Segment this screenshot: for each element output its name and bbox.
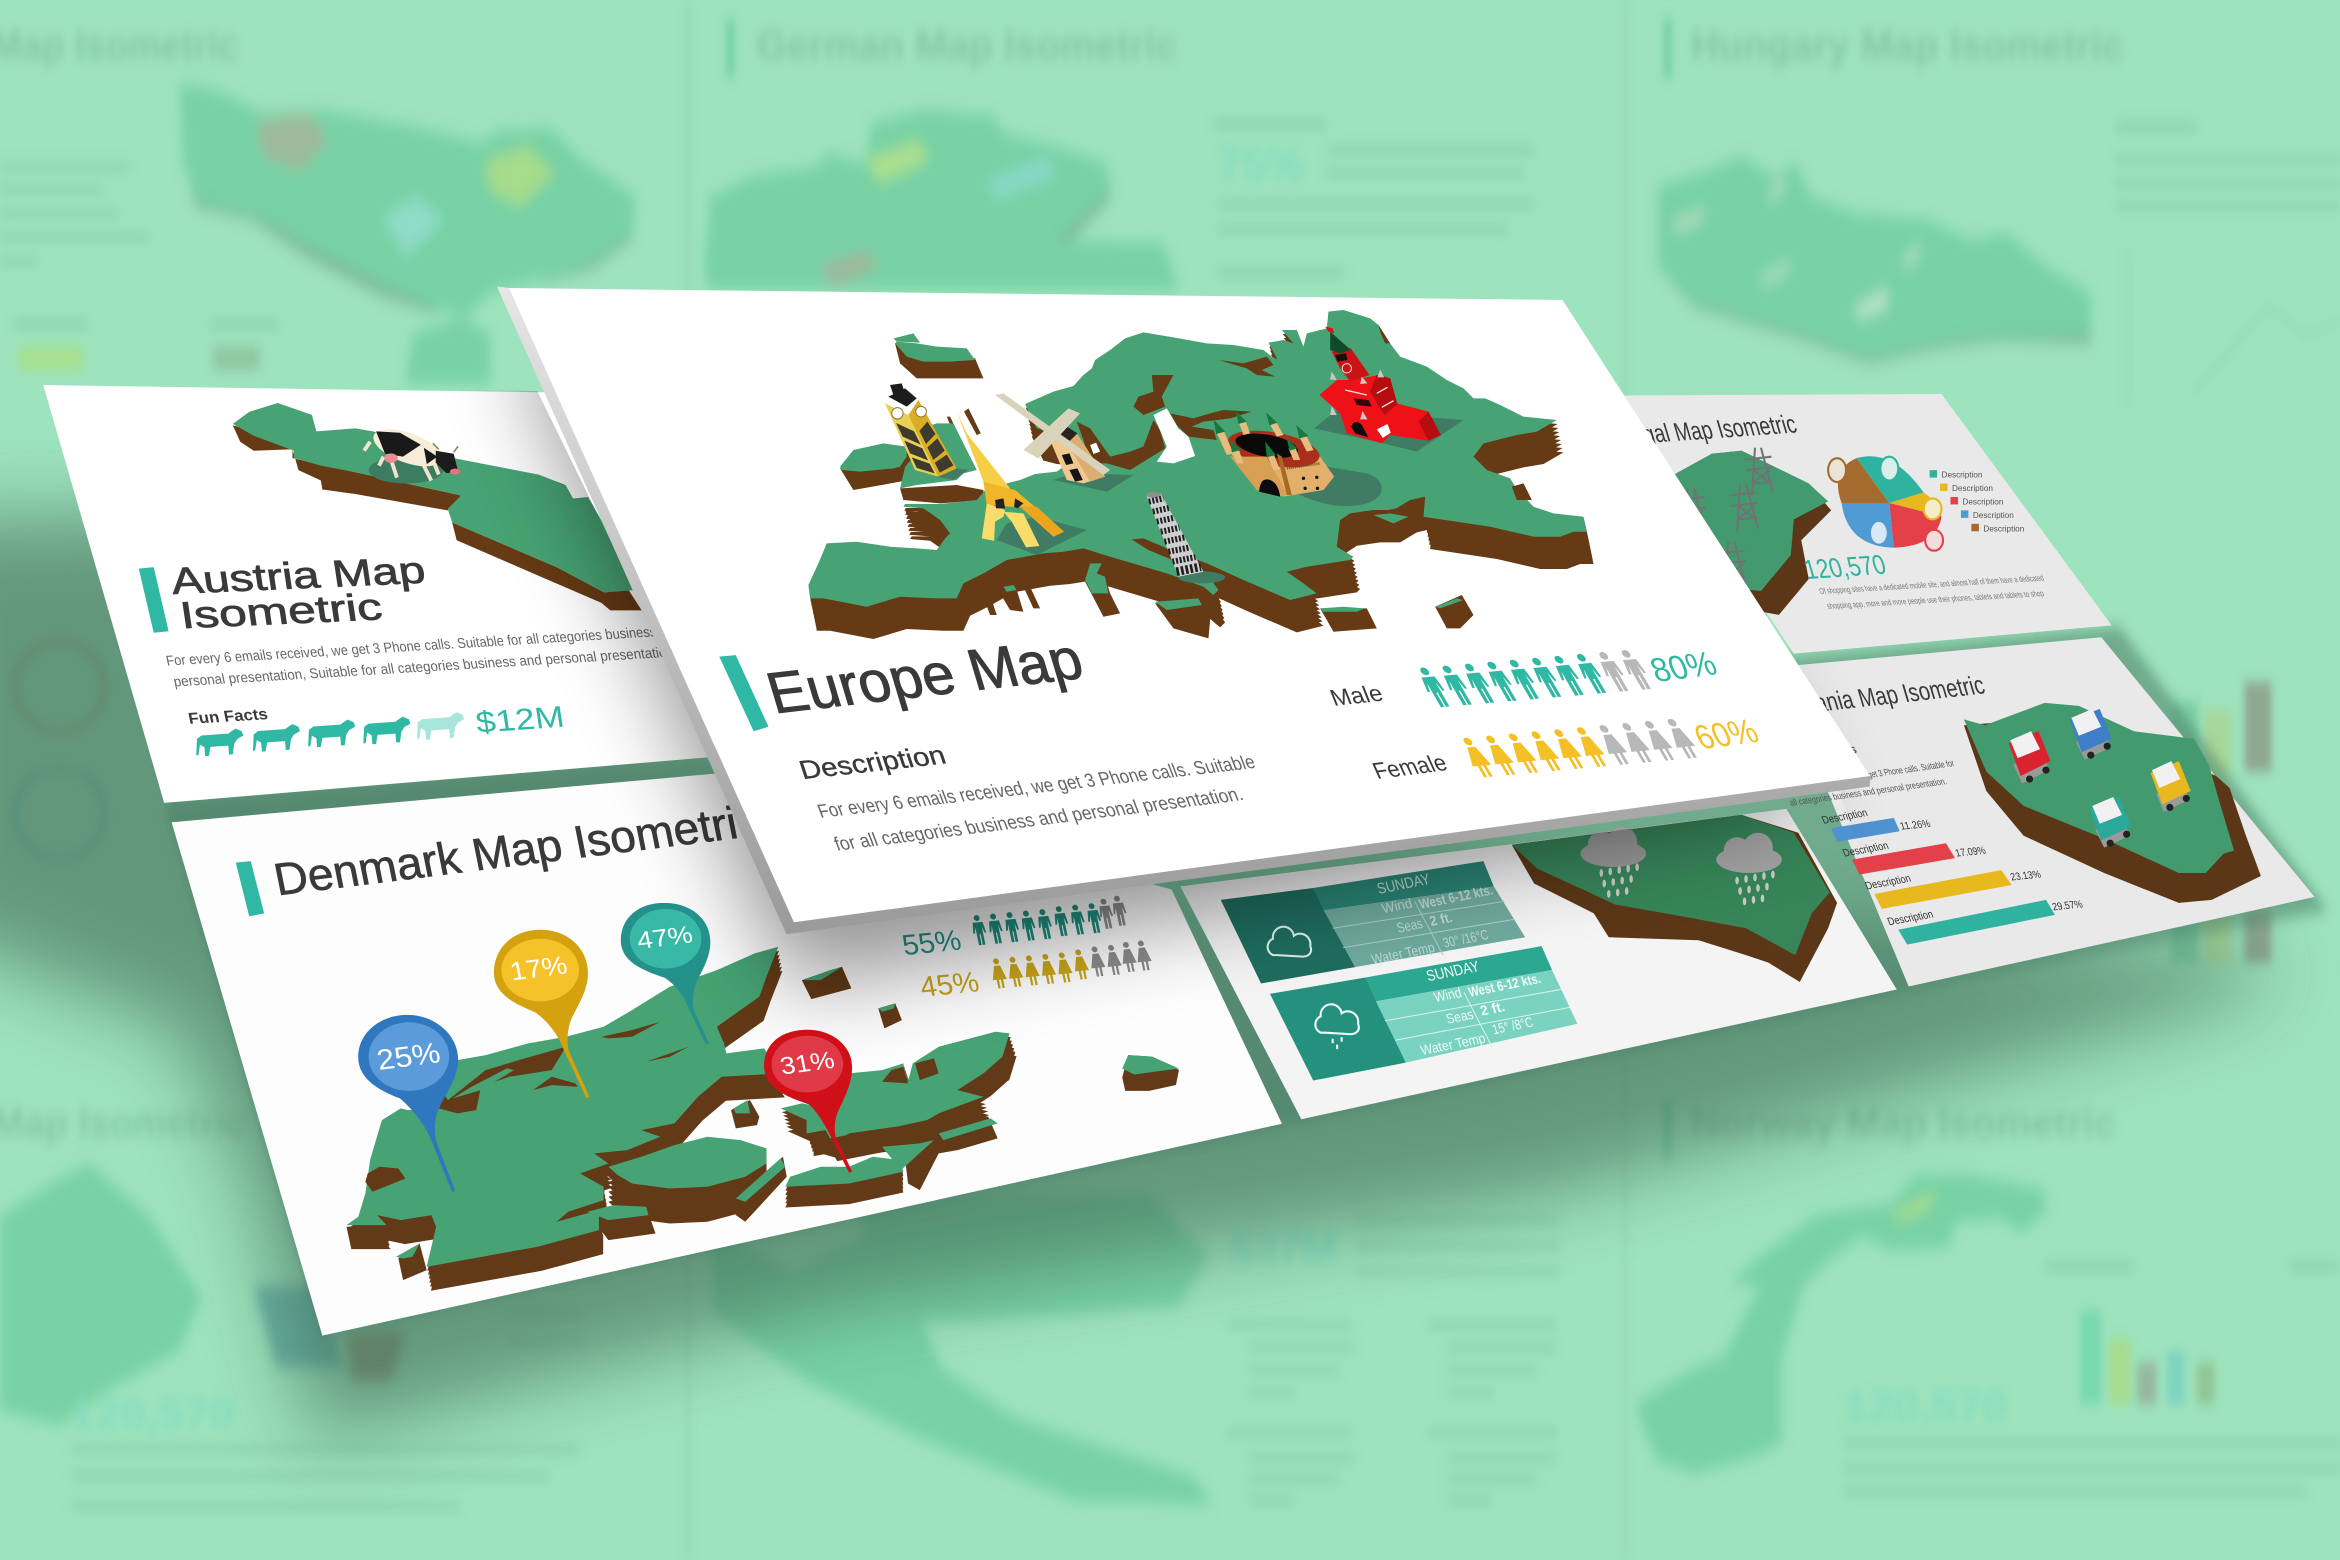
bar chart: 23.13% — [2009, 869, 2043, 883]
weather table: lower: Seas — [1444, 1006, 1475, 1027]
map: Denmark — [346, 947, 1017, 1291]
weather table: upper: 2 ft. — [1427, 909, 1454, 929]
bar chart: Description — [1820, 807, 1870, 827]
stat: $12M — [474, 701, 567, 740]
bar chart: right slide — [2171, 701, 2198, 963]
pin: 31% — [764, 1030, 852, 1173]
heading: Romania: Romania Map Isometric — [1769, 670, 1988, 722]
legend: Description — [1942, 471, 1983, 480]
stat: 120,570 — [1800, 549, 1890, 585]
background map: lower left — [0, 1164, 201, 1425]
pin: 31%: 31% — [778, 1047, 837, 1080]
map: Europe — [808, 310, 1594, 639]
ring charts — [15, 642, 104, 731]
blurred slide blobs — [254, 1286, 343, 1367]
paragraph — [1818, 573, 2045, 611]
description text — [815, 751, 1258, 855]
icons: cows — [196, 712, 464, 757]
icon: car blue — [2070, 709, 2112, 760]
bar chart: 11.26% — [1899, 818, 1932, 833]
icon: Colosseum — [1213, 412, 1334, 497]
bar chart: Description — [1863, 873, 1913, 892]
sea cuts — [1077, 325, 1532, 500]
paragraph: shopping app, more and more people use their phones, tablets and tablets to shop — [1825, 588, 2045, 611]
people stat: female: 60% — [1688, 713, 1764, 757]
line chart: Hungary slide — [2194, 306, 2340, 391]
label: fun facts: Fun Facts — [187, 706, 270, 728]
shadow cast by main slide onto others — [515, 336, 1813, 985]
legend: Description — [1962, 497, 2004, 506]
icon: rain clouds — [1580, 827, 1782, 905]
weather table: lower: West 6-12 kts. — [1466, 970, 1542, 1000]
blurred title: Norway: Norway Map Isometric — [1691, 1099, 2116, 1146]
icon: cloud — [1268, 927, 1311, 957]
icon: Eiffel Tower — [957, 412, 1064, 547]
weather table: upper: Water Temp — [1369, 939, 1437, 967]
weather table: upper: SUNDAY — [1375, 871, 1432, 898]
paragraph: Of shopping sites have a dedicated mobile site, and almost half of them have a dedicated — [1818, 573, 2045, 596]
legend: Description — [1952, 484, 1993, 493]
weather table: upper — [1221, 861, 1525, 983]
map: weather — [1512, 815, 1837, 982]
large drop shadow under slides — [0, 500, 2268, 1440]
heading: Europe Map — [759, 627, 1090, 726]
slide surface — [1776, 637, 2315, 986]
panel: Romania slide — [1769, 637, 2315, 986]
background map: Norway — [1636, 1175, 2047, 1473]
slide surface — [1622, 394, 2112, 654]
people stats: 45% — [917, 966, 982, 1004]
landmark shadows — [937, 410, 1463, 583]
icon: windmill — [995, 393, 1110, 483]
weather table: lower: Wind — [1432, 984, 1463, 1005]
heading: Portugal: Portugal Map Isometric — [1593, 409, 1800, 452]
gap shadow between slides — [164, 627, 2328, 1336]
sub text: For every 6 emails received, we get 3 Phone calls. Suitable for — [1773, 758, 1956, 793]
map: Romania — [1964, 703, 2261, 903]
heading: Isometric — [177, 585, 385, 636]
blurred title: Hungary: Hungary Map Isometric — [1691, 22, 2124, 69]
slide surface — [43, 385, 716, 803]
fjords — [365, 1022, 1009, 1192]
map: Portugal — [1642, 448, 1831, 615]
icon: Kremlin — [1319, 327, 1441, 443]
pin: 25% — [358, 1015, 458, 1192]
icon: car yellow — [2150, 761, 2191, 812]
icon: car red — [2009, 731, 2050, 784]
bar chart — [1820, 807, 2085, 945]
weather table: lower: 2 ft. — [1478, 998, 1507, 1018]
blurred stat: German: 75% — [1218, 139, 1304, 192]
background map: German — [704, 110, 1179, 290]
people stat: female — [1368, 713, 1764, 784]
panel: weather slide — [1180, 809, 1897, 1119]
bar chart: Description — [1841, 840, 1890, 859]
weather table: lower — [1270, 946, 1577, 1080]
slide surface — [172, 772, 1282, 1336]
pin: 17% — [494, 930, 589, 1098]
weather table: lower: 15° /8°C — [1490, 1014, 1535, 1037]
people stat: male — [1326, 645, 1722, 711]
legend — [1930, 470, 2025, 533]
accent bar — [236, 861, 264, 916]
weather table: upper: Wind — [1380, 895, 1414, 916]
icon: cow — [364, 421, 460, 484]
land surface — [346, 947, 1009, 1267]
people stat: female: Female — [1368, 750, 1451, 784]
panel: Portugal slide — [1593, 394, 2112, 654]
pin: 47% — [621, 903, 710, 1045]
bar chart: 17.09% — [1954, 845, 1988, 860]
pin: 47%: 47% — [635, 921, 695, 955]
blurred stats: Austria facts — [19, 346, 84, 370]
accent bar — [719, 655, 769, 731]
sub text: all categories business and personal presentation. — [1788, 776, 1948, 808]
heading: Austria Map — [168, 549, 428, 602]
people stat: male: 80% — [1645, 645, 1722, 690]
accent bar — [139, 567, 169, 633]
pin: 17%: 17% — [508, 951, 570, 986]
panel: Europe main slide — [497, 287, 1870, 934]
background map: Austria — [180, 83, 635, 383]
blurred title: German: German Map Isometric — [757, 22, 1177, 69]
islands: Bornholm — [1122, 1055, 1179, 1091]
blurred title accent bars — [727, 19, 1671, 1160]
map: Austria — [233, 403, 642, 610]
background map: Croatia — [713, 1194, 1212, 1504]
pie chart — [1828, 456, 1943, 551]
weather table: upper: West 6-12 kts. — [1417, 882, 1495, 912]
paragraph: For every 6 emails received, we get 3 Phone calls. Suitable for all categories business and — [165, 623, 683, 670]
people stats — [899, 895, 1153, 1004]
blurred stat: Norway: 120,570 — [1843, 1383, 2007, 1430]
bar chart: 29.57% — [2051, 899, 2085, 913]
weather table: upper: Seas — [1395, 915, 1425, 936]
icon: Big Ben — [885, 383, 957, 477]
paragraph — [165, 623, 683, 690]
panel: Denmark slide — [172, 772, 1282, 1336]
icon: pylons — [1677, 448, 1773, 590]
icon: rain cloud — [1315, 1004, 1359, 1049]
weather table: lower: Water Temp — [1418, 1030, 1487, 1058]
people stat: male: Male — [1326, 680, 1387, 711]
paragraph: personal presentation, Suitable for all categories business and personal presentation — [172, 645, 675, 690]
legend: Description — [1973, 511, 2014, 520]
heading — [168, 549, 428, 636]
faint column dividers — [686, 0, 2129, 1560]
subheading: Description — [795, 740, 950, 785]
panel: Austria slide — [43, 385, 716, 803]
land extrusion — [346, 951, 1017, 1291]
slide surface — [509, 288, 1870, 922]
background map: Hungary — [1658, 157, 2091, 363]
map pins: Denmark — [358, 903, 852, 1192]
icon: car teal — [2089, 797, 2131, 848]
land extrusion — [809, 314, 1594, 639]
people stats: 55% — [899, 925, 964, 962]
bar chart: Norway slide — [2080, 1310, 2101, 1404]
sub text: Analysis — [1805, 742, 1859, 763]
blurred stat: Croatia: $37M — [1230, 1223, 1337, 1273]
blurred stat: lower left: 120,570 — [70, 1390, 234, 1437]
legend: Description — [1983, 524, 2025, 533]
weather table: upper: 30° /16°C — [1441, 926, 1490, 951]
pin: 25%: 25% — [374, 1037, 443, 1077]
blurred title: lower left: Map Isometric — [0, 1099, 246, 1146]
weather table: lower: SUNDAY — [1424, 958, 1482, 985]
Baltic sea — [1153, 408, 1195, 463]
icon: Pisa tower — [1146, 492, 1203, 577]
slide surface — [1180, 809, 1897, 1119]
description text: For every 6 emails received, we get 3 Phone calls. Suitable — [815, 751, 1258, 823]
sub text — [1773, 742, 1956, 808]
bar chart: Description — [1886, 909, 1935, 928]
slide edge — [497, 287, 1870, 934]
land surface — [808, 310, 1587, 612]
description text: for all categories business and personal presentation. — [831, 783, 1246, 855]
heading: Denmark Map Isometric — [269, 794, 765, 905]
